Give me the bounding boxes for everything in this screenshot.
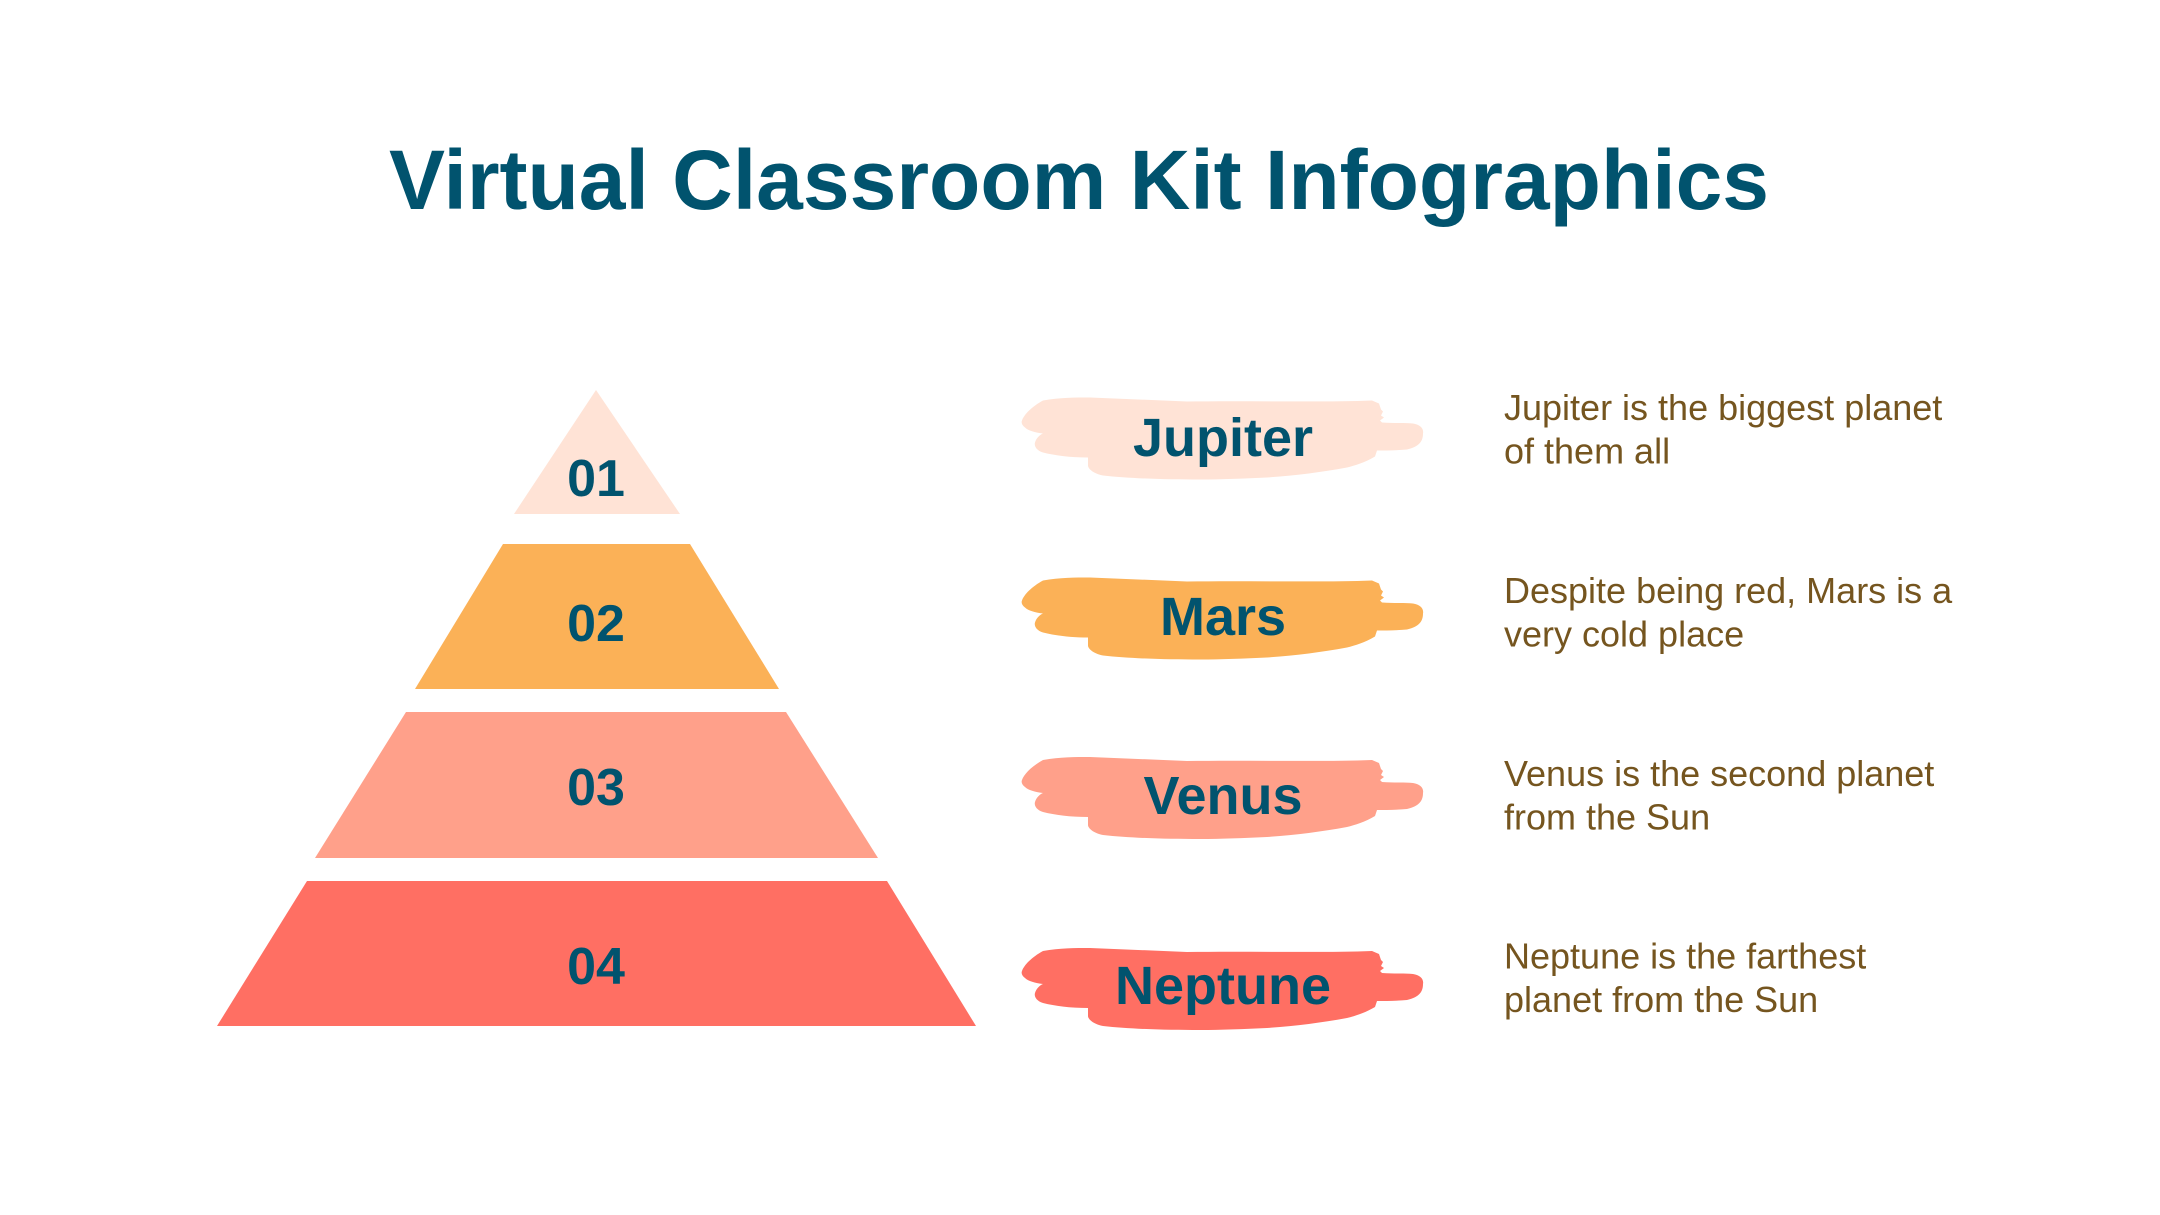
brush label: Mars: Mars: [1160, 587, 1286, 647]
row: Mars: [1022, 570, 1953, 660]
tier 02: [415, 544, 779, 689]
description: Venus: Venus is the second planet: [1504, 753, 1934, 794]
row: Neptune: [1022, 936, 1866, 1030]
description: Mars: Despite being red, Mars is a: [1504, 570, 1952, 611]
tier 01: 01: [567, 450, 625, 508]
description: Mars: very cold place: [1504, 614, 1744, 654]
pyramid chart: [217, 390, 976, 1026]
description: Jupiter: of them all: [1504, 430, 1670, 472]
description: Neptune: Neptune is the farthest: [1504, 936, 1866, 976]
row: Venus: [1022, 753, 1934, 839]
brush label: Venus: Venus: [1143, 766, 1303, 826]
title: Virtual Classroom Kit Infographics: [389, 133, 1769, 227]
brush label: Jupiter: [1022, 398, 1423, 480]
brush label: Venus: [1022, 757, 1423, 839]
row: Jupiter: [1022, 387, 1942, 480]
tier 04: 04: [567, 938, 625, 996]
brush label: Jupiter: Jupiter: [1133, 408, 1313, 468]
description: Venus: from the Sun: [1504, 796, 1710, 838]
tier 01: [514, 390, 680, 514]
tier 03: [315, 712, 878, 858]
tier 04: [217, 881, 976, 1026]
brush label: Neptune: [1022, 948, 1423, 1030]
tier 03: 03: [567, 759, 625, 817]
brush label: Mars: [1022, 578, 1423, 660]
tier 02: 02: [567, 595, 625, 653]
brush label: Neptune: Neptune: [1115, 956, 1331, 1016]
description: Neptune: planet from the Sun: [1504, 979, 1818, 1020]
description: Jupiter: Jupiter is the biggest planet: [1504, 387, 1942, 428]
